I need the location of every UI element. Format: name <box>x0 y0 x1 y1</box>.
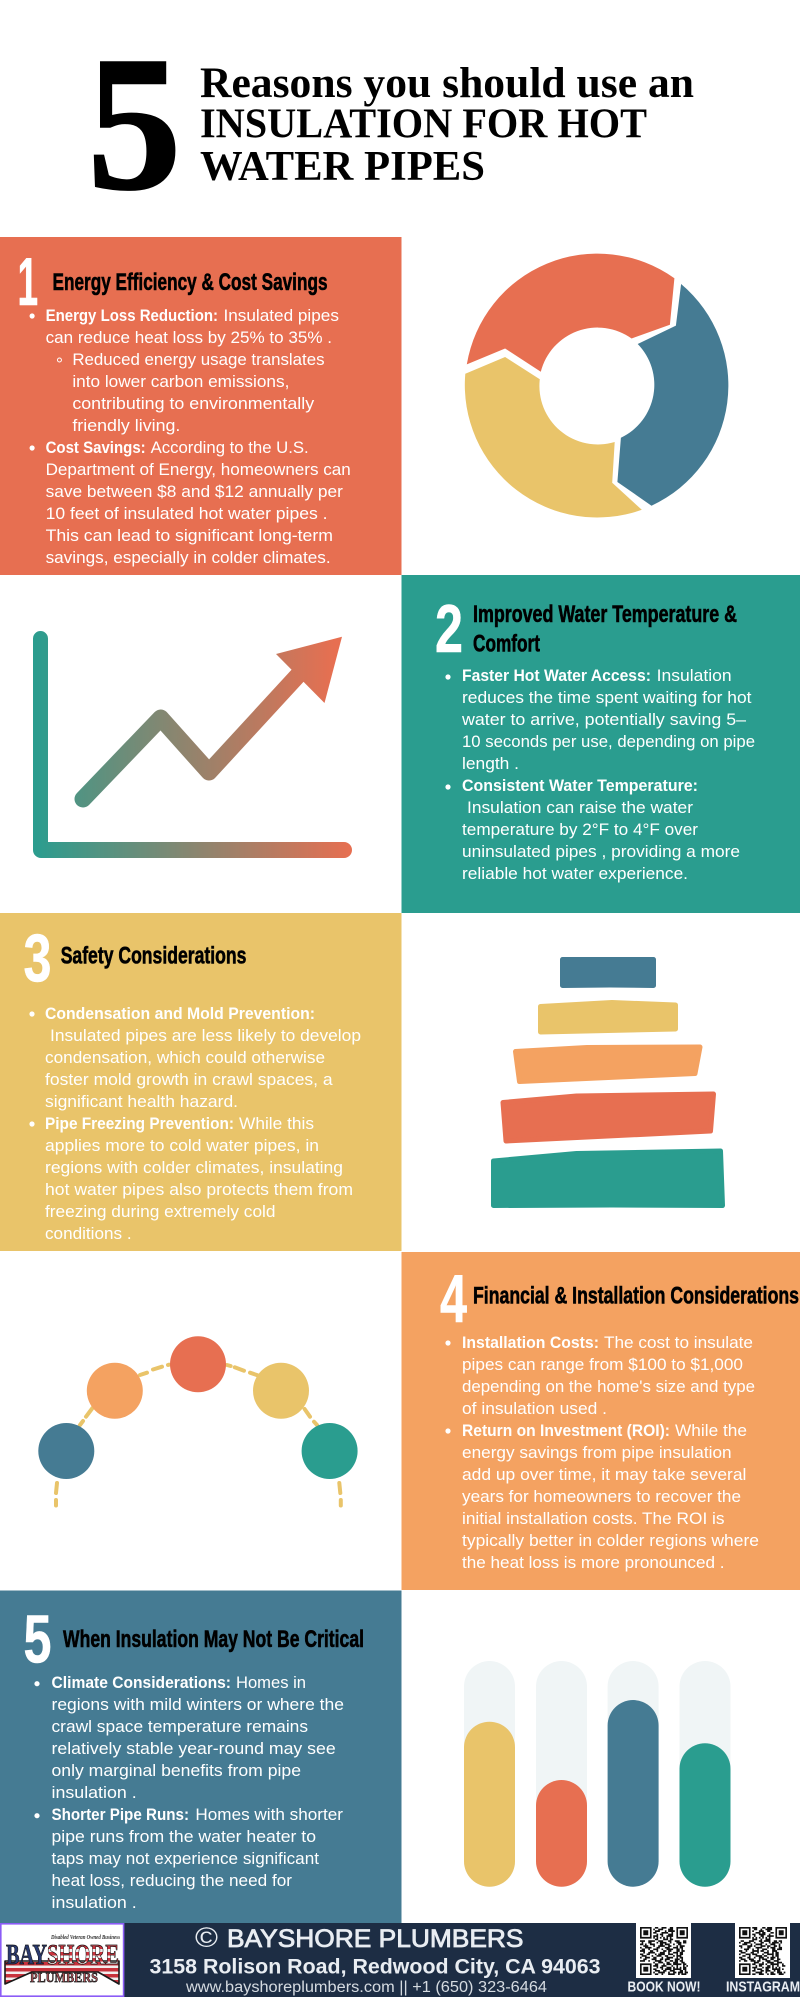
section number 2: 2 <box>435 591 463 667</box>
company name: © <box>195 1922 218 1953</box>
bar: blue <box>608 1700 659 1887</box>
panel: when not critical <box>0 1590 402 1923</box>
panel: financial <box>402 1252 800 1590</box>
bullet list 1: Department of Energy, homeowners can <box>46 460 351 479</box>
bullet list 3: applies more to cold water pipes, in <box>45 1136 319 1155</box>
bullet list 5: crawl space temperature remains <box>52 1717 308 1736</box>
bullet list 3 <box>29 1004 361 1243</box>
bullet list 5: pipe runs from the water heater to <box>52 1827 316 1846</box>
bullet list 5: heat loss, reducing the need for <box>52 1871 292 1890</box>
bullet list 4: of insulation used . <box>462 1399 607 1418</box>
big number five: 5 <box>87 17 181 230</box>
company name: BAYSHORE PLUMBERS <box>227 1925 524 1953</box>
bullet list 2: reliable hot water experience. <box>462 864 688 883</box>
dot: yellow <box>253 1363 309 1419</box>
section number 1: 1 <box>18 244 38 320</box>
donut segment: red <box>467 254 674 372</box>
bullet list 3: conditions . <box>45 1224 132 1243</box>
panel: energy efficiency <box>0 237 402 575</box>
bar track 2 <box>536 1661 587 1887</box>
bullet list 3: Condensation and Mold Prevention: <box>45 1004 315 1023</box>
bullet list 1: contributing to environmentally <box>72 394 315 413</box>
bullet list 4: pipes can range from $100 to $1,000 <box>462 1355 743 1374</box>
section heading 2: Comfort <box>473 630 540 658</box>
bullet list 5: taps may not experience significant <box>52 1849 319 1868</box>
bullet list 1: 10 feet of insulated hot water pipes . <box>46 504 328 523</box>
line chart with arrow <box>33 631 352 858</box>
bullet list 5: Climate Considerations: <box>52 1673 231 1692</box>
bullet list 3: While this <box>239 1114 314 1133</box>
bullet list 1: friendly living. <box>72 416 180 435</box>
panel: water temperature <box>402 575 800 913</box>
bar track 1 <box>464 1661 515 1887</box>
bullet list 4 <box>445 1333 759 1572</box>
dashed connectors <box>56 1365 341 1506</box>
bar: red <box>536 1780 587 1887</box>
bullet list 1: Reduced energy usage translates <box>72 350 325 369</box>
panel: safety <box>0 913 402 1251</box>
stacked layers pyramid <box>494 960 722 1206</box>
footer band <box>0 1922 800 1997</box>
bullet list 2: Insulation can raise the water <box>467 798 693 817</box>
bullet list 5: relatively stable year-round may see <box>52 1739 336 1758</box>
bullet list 1: Insulated pipes <box>223 306 339 325</box>
bullet list 3: hot water pipes also protects them from <box>45 1180 353 1199</box>
bullet list 3: condensation, which could otherwise <box>45 1048 325 1067</box>
bar: yellow <box>464 1722 515 1887</box>
bullet list 1: savings, especially in colder climates. <box>46 548 331 567</box>
bullet list 5: Shorter Pipe Runs: <box>52 1805 189 1824</box>
bullet list 4: energy savings from pipe insulation <box>462 1443 732 1462</box>
bullet list 5: Homes in <box>236 1673 306 1692</box>
layer: teal <box>494 1151 722 1206</box>
bullet list 4: Installation Costs: <box>462 1333 599 1352</box>
bullet list 3: regions with colder climates, insulating <box>45 1158 343 1177</box>
bullet list 2: reduces the time spent waiting for hot <box>462 688 752 707</box>
donut segment: yellow <box>465 357 642 517</box>
bullet list 3: Insulated pipes are less likely to develop <box>50 1026 361 1045</box>
section heading 2 <box>473 601 737 658</box>
bullet list 4: typically better in colder regions where <box>462 1531 759 1550</box>
dot: red <box>170 1336 226 1392</box>
title <box>87 17 694 230</box>
bullet list 3: significant health hazard. <box>45 1092 238 1111</box>
company logo: SHORE <box>47 1939 119 1971</box>
bullet list 2: temperature by 2°F to 4°F over <box>462 820 698 839</box>
bullet list 2: Insulation <box>657 666 732 685</box>
bullet list 3: foster mold growth in crawl spaces, a <box>45 1070 333 1089</box>
donut chart <box>465 254 728 517</box>
section heading 3: Safety Considerations <box>61 942 246 970</box>
bullet list 2: length . <box>462 754 519 773</box>
bullet list 3: Pipe Freezing Prevention: <box>45 1114 234 1133</box>
bullet list 2 <box>445 666 755 883</box>
section heading 1: Energy Efficiency & Cost Savings <box>52 269 328 296</box>
chart axes <box>33 631 352 858</box>
section number 5: 5 <box>24 1602 52 1678</box>
dot: blue <box>38 1423 94 1479</box>
dot: teal <box>302 1423 358 1479</box>
arrow head <box>276 637 342 703</box>
bullet list 5: insulation . <box>52 1893 137 1912</box>
section number 4: 4 <box>440 1261 467 1337</box>
website and phone: www.bayshoreplumbers.com || +1 (650) 323-6464 <box>185 1979 547 1996</box>
label: book now: BOOK NOW! <box>628 1979 700 1996</box>
section number 3: 3 <box>24 920 52 996</box>
title line 1: Reasons you should use an <box>200 60 694 107</box>
bar track 3 <box>608 1661 659 1887</box>
bullet list 1: Cost Savings: <box>46 438 146 457</box>
section heading 5: When Insulation May Not Be Critical <box>63 1626 364 1653</box>
bullet list 3: freezing during extremely cold <box>45 1202 276 1221</box>
company logo: Disabled Veteran Owned Business <box>50 1935 121 1941</box>
rising trend line <box>83 672 301 799</box>
bullet list 5: Homes with shorter <box>195 1805 343 1824</box>
bullet list 4: add up over time, it may take several <box>462 1465 746 1484</box>
company logo <box>1 1924 124 1996</box>
bullet list 4: The cost to insulate <box>604 1333 753 1352</box>
connected dots diagram <box>38 1336 358 1506</box>
bullet list 2: water to arrive, potentially saving 5– <box>461 710 747 729</box>
bullet list 2: uninsulated pipes , providing a more <box>462 842 740 861</box>
title line 2: INSULATION FOR HOT <box>200 102 647 148</box>
bullet list 5 <box>34 1673 344 1912</box>
bullet list 4: Return on Investment (ROI): <box>462 1421 670 1440</box>
bullet list 1: into lower carbon emissions, <box>72 372 289 391</box>
QR code: book now <box>636 1923 691 1978</box>
bullet list 1: This can lead to significant long-term <box>46 526 333 545</box>
bullet list 5: insulation . <box>52 1783 137 1802</box>
layer: blue <box>562 960 654 986</box>
bullet list 2: Consistent Water Temperature: <box>462 776 698 795</box>
bullet list 4: initial installation costs. The ROI is <box>462 1509 724 1528</box>
dot: sandy <box>87 1363 143 1419</box>
title line 3: WATER PIPES <box>200 144 485 190</box>
address: 3158 Rolison Road, Redwood City, CA 94063 <box>150 1955 600 1978</box>
bar track 4 <box>680 1661 730 1887</box>
bullet list 1: can reduce heat loss by 25% to 35% . <box>46 328 332 347</box>
bullet list 2: Faster Hot Water Access: <box>462 666 651 685</box>
layer: sandy <box>516 1047 700 1082</box>
layer: red <box>503 1094 714 1141</box>
bullet list 5: regions with mild winters or where the <box>52 1695 344 1714</box>
bullet list 4: years for homeowners to recover the <box>462 1487 741 1506</box>
bullet list 2: 10 seconds per use, depending on pipe <box>462 732 755 751</box>
bullet list 4: depending on the home's size and type <box>462 1377 755 1396</box>
bullet list 4: the heat loss is more pronounced . <box>462 1553 724 1572</box>
bullet list 1: save between $8 and $12 annually per <box>46 482 343 501</box>
layer: yellow <box>540 1002 676 1032</box>
bullet list 5: only marginal benefits from pipe <box>52 1761 301 1780</box>
company logo: PLUMBERS <box>30 1971 98 1986</box>
QR code: instagram <box>735 1923 790 1978</box>
bullet list 1: According to the U.S. <box>151 438 309 457</box>
bullet list 1 <box>30 306 351 567</box>
pill bar chart <box>464 1661 730 1887</box>
bullet list 4: While the <box>675 1421 747 1440</box>
bar: teal <box>680 1743 730 1887</box>
company logo: BAY <box>6 1939 47 1971</box>
donut segment: blue <box>617 284 728 506</box>
bullet list 1: Energy Loss Reduction: <box>46 306 218 325</box>
